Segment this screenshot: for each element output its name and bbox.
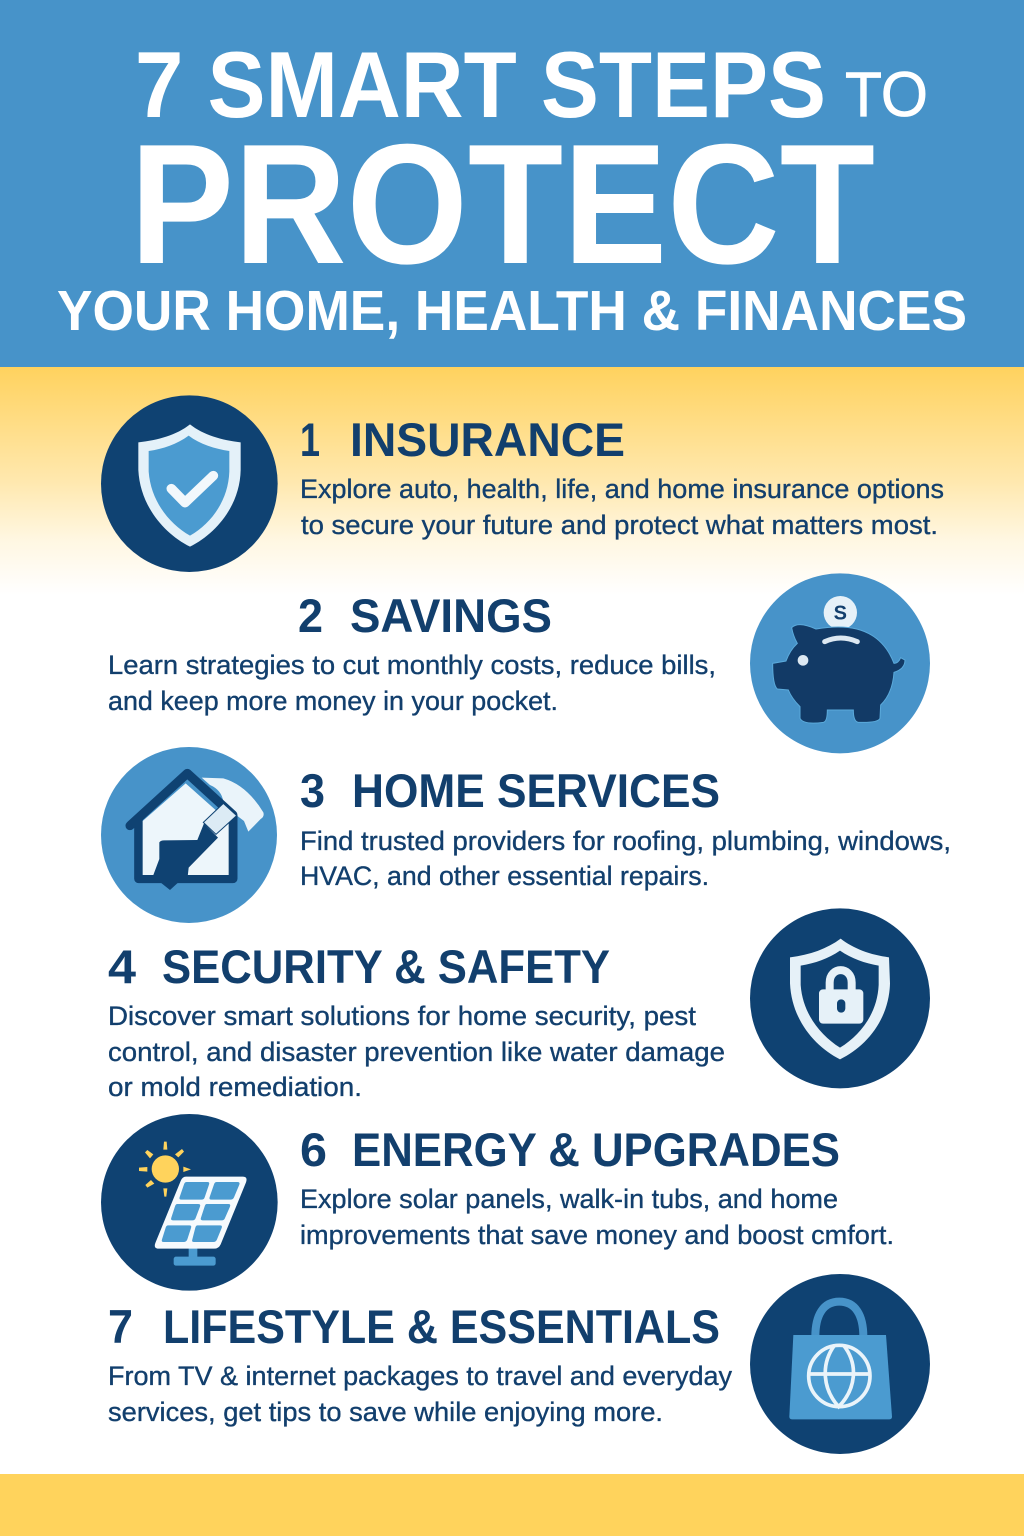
description: savings: and keep more money in your pocket. bbox=[108, 686, 558, 716]
step 2: savings: SAVINGS bbox=[350, 589, 552, 642]
subtitle: YOUR HOME, HEALTH & FINANCES bbox=[57, 279, 967, 343]
description: home services: HVAC, and other essential repairs. bbox=[300, 861, 709, 891]
description: energy and upgrades: Explore solar panels, walk-in tubs, and home bbox=[300, 1184, 838, 1214]
step 4: security and safety: SECURITY & SAFETY bbox=[162, 940, 610, 993]
icon: house with hammer bbox=[101, 747, 277, 923]
heading: 4 security and safety: 4 bbox=[108, 940, 136, 993]
step 1: insurance: INSURANCE bbox=[350, 413, 625, 466]
description: security and safety bbox=[108, 1001, 725, 1102]
description: home services bbox=[300, 826, 951, 891]
heading: 2 savings: 2 bbox=[298, 589, 323, 642]
footer bar bbox=[0, 1474, 1024, 1536]
header banner bbox=[0, 0, 1024, 367]
step 1: insurance bbox=[101, 395, 944, 572]
description: savings bbox=[108, 650, 716, 716]
title word: to: TO bbox=[845, 60, 928, 130]
step 4: security and safety bbox=[108, 908, 930, 1102]
title word: protect: PROTECT bbox=[130, 109, 875, 300]
description: insurance bbox=[300, 474, 944, 540]
description: insurance: to secure your future and protect what matters most. bbox=[301, 510, 938, 540]
icon: piggy bank: S bbox=[834, 603, 847, 625]
icon: piggy bank bbox=[750, 573, 930, 753]
icon: sun and solar panel bbox=[101, 1114, 278, 1291]
step 6: energy and upgrades bbox=[101, 1114, 894, 1291]
heading: 7 lifestyle and essentials: 7 bbox=[108, 1300, 133, 1353]
description: lifestyle and essentials: services, get tips to save while enjoying more. bbox=[108, 1397, 663, 1427]
description: lifestyle and essentials: From TV & internet packages to travel and everyday bbox=[108, 1361, 732, 1391]
description: savings: Learn strategies to cut monthly costs, reduce bills, bbox=[108, 650, 716, 680]
description: insurance: Explore auto, health, life, and home insurance options bbox=[300, 474, 944, 504]
icon: shield with check bbox=[101, 395, 278, 572]
icon: shield with padlock bbox=[750, 908, 930, 1088]
step 2: savings bbox=[108, 573, 930, 753]
description: energy and upgrades bbox=[300, 1184, 894, 1250]
step 7: lifestyle and essentials: LIFESTYLE & ESSENTIALS bbox=[163, 1300, 720, 1353]
step 3: home services: HOME SERVICES bbox=[352, 764, 720, 817]
description: lifestyle and essentials bbox=[108, 1361, 732, 1427]
step 6: energy and upgrades: ENERGY & UPGRADES bbox=[352, 1123, 840, 1176]
step 7: lifestyle and essentials bbox=[108, 1274, 930, 1454]
title line: 7 smart steps: 7 SMART STEPS bbox=[135, 32, 826, 137]
icon: shopping bag with globe bbox=[750, 1274, 930, 1454]
step 3: home services bbox=[101, 747, 951, 923]
heading: 6 energy and upgrades: 6 bbox=[300, 1123, 327, 1176]
description: home services: Find trusted providers for roofing, plumbing, windows, bbox=[300, 826, 951, 856]
heading: 3 home services: 3 bbox=[300, 764, 325, 817]
description: energy and upgrades: improvements that save money and boost cmfort. bbox=[300, 1220, 894, 1250]
description: security and safety: or mold remediation. bbox=[108, 1072, 362, 1102]
description: security and safety: control, and disaster prevention like water damage bbox=[108, 1037, 725, 1067]
description: security and safety: Discover smart solutions for home security, pest bbox=[108, 1001, 697, 1031]
heading: 1 insurance: 1 bbox=[300, 413, 320, 466]
